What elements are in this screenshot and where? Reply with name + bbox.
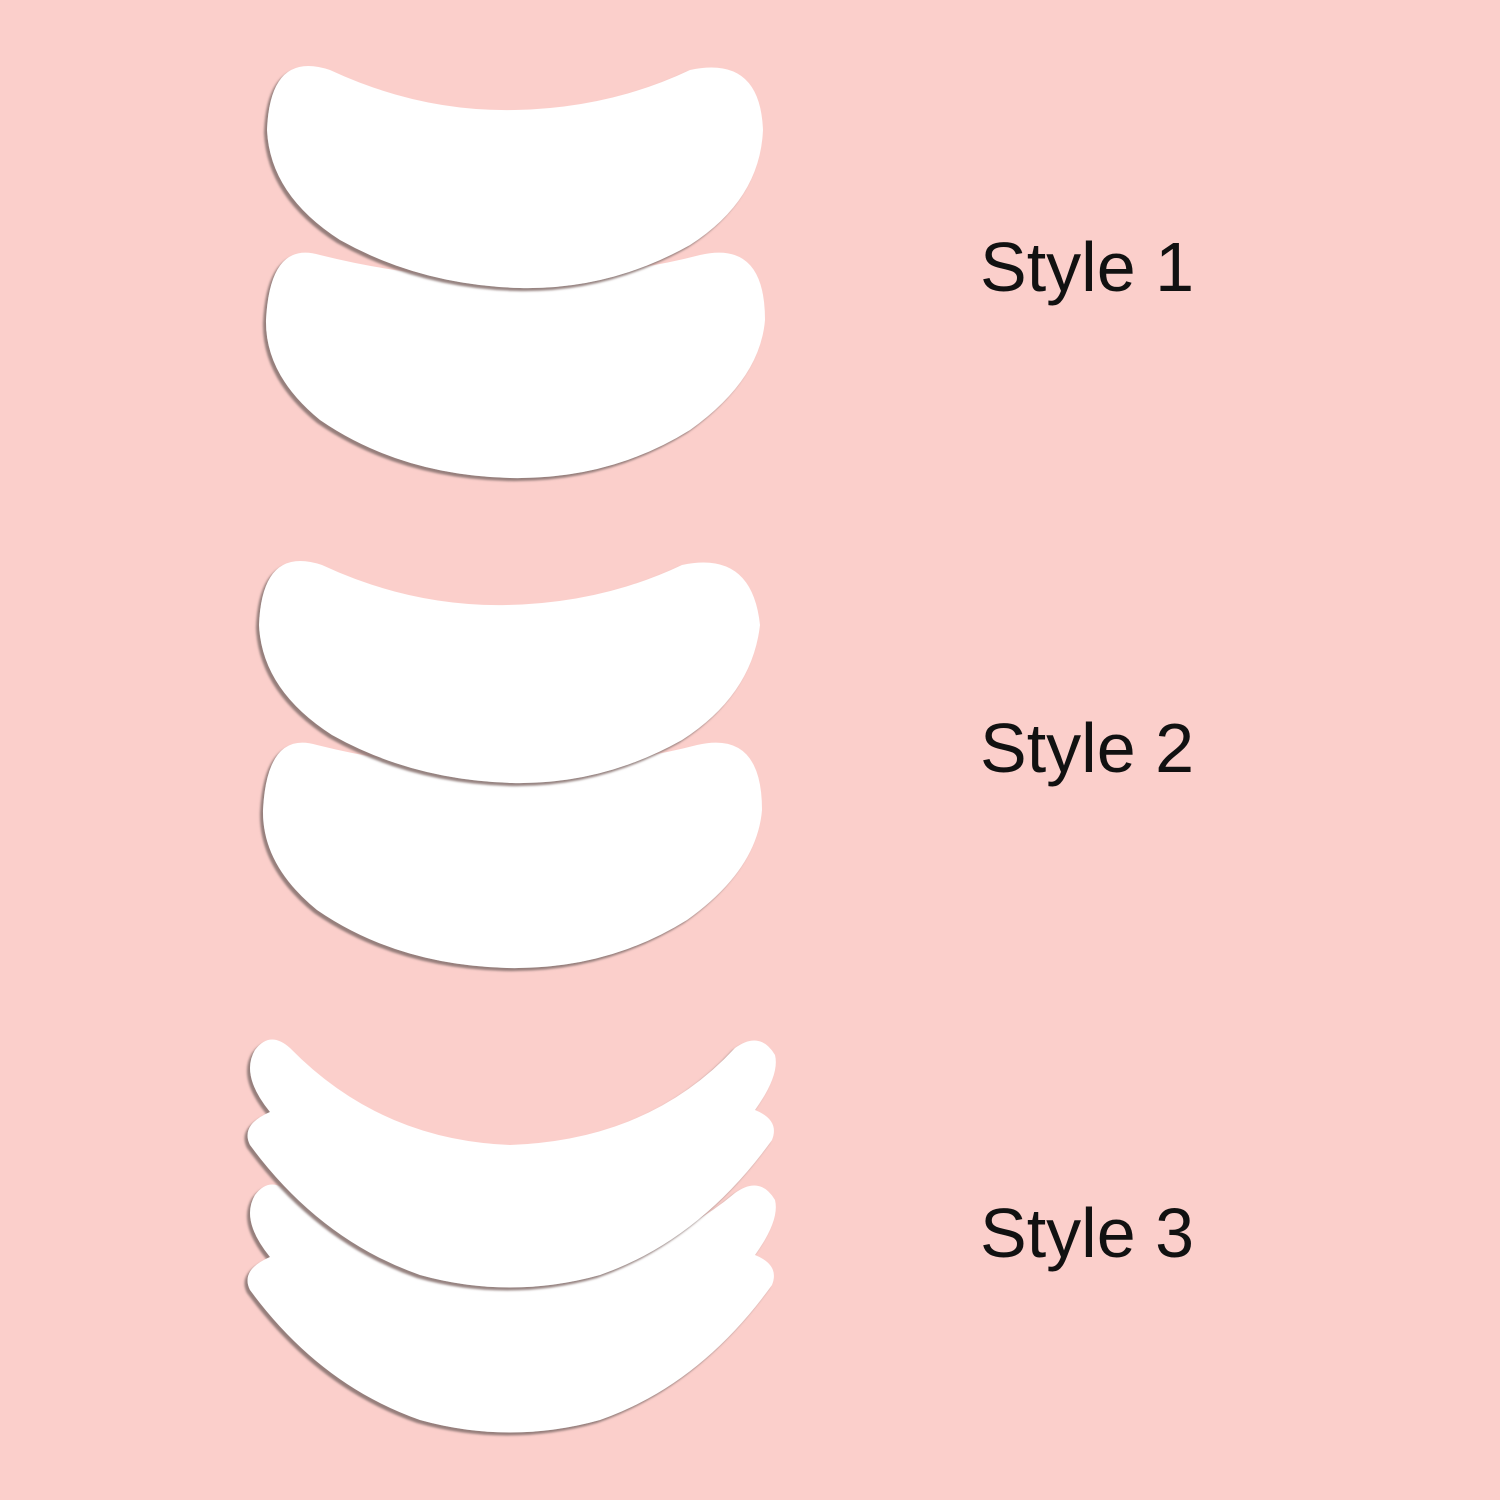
style 3 pads (248, 1039, 776, 1432)
style 1 pads (266, 66, 765, 478)
label: Style 1: Style 1 (980, 228, 1194, 306)
style 2 pads (259, 561, 762, 968)
label: Style 2: Style 2 (980, 709, 1194, 787)
label: Style 3: Style 3 (980, 1194, 1194, 1272)
